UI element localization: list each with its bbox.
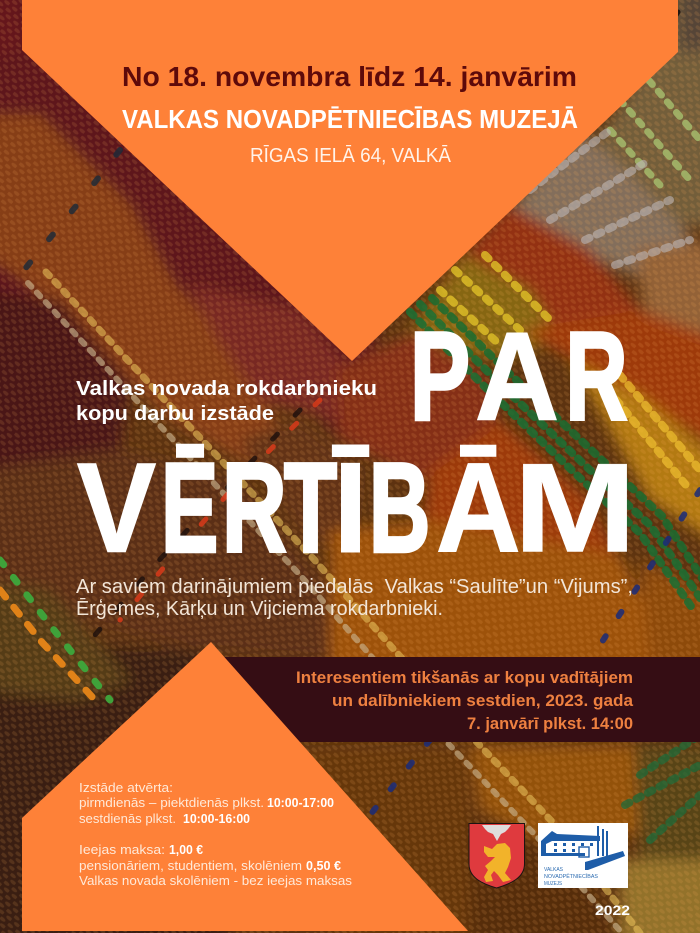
title: VĒRTĪBĀM: B: [369, 436, 430, 578]
icon: museum logo: NOVADPĒTNIECĪBAS: [544, 873, 599, 880]
text: opening hours and prices: pirmdienās – piektdienās plkst.: [79, 795, 264, 810]
icon: museum logo: VALKAS: [544, 867, 564, 873]
text: address: RĪGAS IELĀ 64, VALKĀ: [250, 144, 452, 167]
title: PAR: P: [410, 308, 470, 446]
icon: museum logo: [538, 823, 628, 888]
text: opening hours and prices: Valkas novada skolēniem - bez ieejas maksas: [79, 873, 353, 888]
red and black stitches crossing the brown area: [120, 400, 320, 620]
text: opening hours and prices: sestdienās plkst.: [79, 811, 176, 826]
title: VĒRTĪBĀM: V: [77, 436, 156, 578]
text: exhibition subtitle: [76, 378, 377, 425]
green and orange stitches lower left: [0, 560, 110, 700]
title: VĒRTĪBĀM: R: [222, 436, 287, 578]
text: meeting invitation: un dalībniekiem sestdien, 2023. gada: [332, 692, 634, 710]
title: VĒRTĪBĀM: T: [284, 436, 337, 578]
heading: dates: No 18. novembra līdz 14. janvārim: [122, 61, 577, 92]
title: VĒRTĪBĀM: Ē: [161, 436, 218, 578]
text: opening hours and prices: 10:00-16:00: [183, 811, 250, 826]
heading: museum name: VALKAS NOVADPĒTNIECĪBAS MUZEJĀ: [122, 104, 578, 134]
text: participants: Ar saviem darinājumiem piedalās Valkas “Saulīte”un “Vijums”,: [76, 576, 633, 598]
text: opening hours and prices: pensionāriem, studentiem, skolēniem: [79, 858, 302, 873]
text: participants: [76, 576, 633, 620]
text: meeting invitation: 7. janvārī plkst. 14:00: [467, 715, 633, 733]
title: VĒRTĪBĀM: M: [514, 436, 636, 578]
text: opening hours and prices: 0,50 €: [306, 858, 341, 873]
text: opening hours and prices: [79, 780, 353, 888]
text: opening hours and prices: 1,00 €: [169, 842, 203, 857]
panel: top orange arrow: [22, 0, 678, 361]
panel: dark meeting banner: [200, 657, 700, 742]
blue stitches: [370, 490, 700, 815]
sage stitches: [610, 70, 700, 185]
title: VĒRTĪBĀM: Ī: [332, 436, 369, 578]
panel: bottom orange house shape: [22, 642, 468, 931]
text: opening hours and prices: Ieejas maksa:: [79, 842, 165, 857]
title: PAR: R: [566, 308, 628, 446]
text: meeting invitation: [296, 669, 634, 733]
title: VĒRTĪBĀM: Ā: [436, 436, 520, 578]
text: opening hours and prices: 10:00-17:00: [267, 795, 334, 810]
text: participants: Ērģemes, Kārķu un Vijciema rokdarbnieki.: [76, 597, 443, 620]
icon: museum logo: MUZEJS: [544, 881, 563, 887]
title: PAR: A: [475, 308, 559, 446]
text: exhibition subtitle: kopu darbu izstāde: [76, 403, 274, 425]
text: exhibition subtitle: Valkas novada rokdarbnieku: [76, 378, 377, 400]
icon: Valka coat of arms: [469, 824, 524, 888]
text: year: 2022: [595, 902, 630, 918]
long pale diagonal stripe: [28, 283, 622, 933]
text: opening hours and prices: Izstāde atvērta:: [79, 780, 173, 795]
text: meeting invitation: Interesentiem tikšanās ar kopu vadītājiem: [296, 669, 633, 687]
black stitches: [640, 12, 678, 70]
grey stitches: [530, 130, 690, 265]
yellow stitches: [440, 255, 550, 345]
green diagonal band: [410, 312, 695, 612]
